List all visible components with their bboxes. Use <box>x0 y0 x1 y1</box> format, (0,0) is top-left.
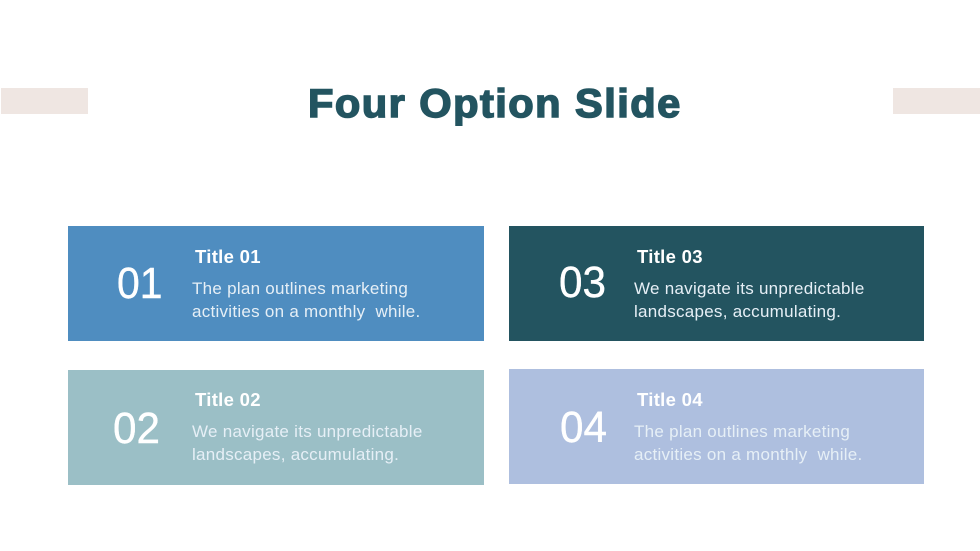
number 02: 02 <box>113 404 160 453</box>
number 03: 03 <box>559 258 606 307</box>
panel: option 01 <box>68 226 484 341</box>
body text 04: The plan outlines marketing activities on a monthly while. <box>634 422 863 464</box>
heading: title 01: Title 01 <box>195 246 261 267</box>
body text 02: We navigate its unpredictable landscapes, accumulating. <box>192 422 423 464</box>
heading: title 04: Title 04 <box>637 389 703 410</box>
panel: option 02 <box>68 370 484 485</box>
body text 03: We navigate its unpredictable landscapes, accumulating. <box>634 279 865 321</box>
number 04: 04 <box>560 403 607 452</box>
panel: option 03 <box>509 226 924 341</box>
heading: title 02: Title 02 <box>195 389 261 410</box>
number 01: 01 <box>117 259 163 308</box>
right decorative bar <box>893 88 980 114</box>
body text 01: The plan outlines marketing activities on a monthly while. <box>192 279 421 321</box>
title: Four Option Slide <box>308 82 682 126</box>
panel: option 04 <box>509 369 924 484</box>
heading: title 03: Title 03 <box>637 246 703 267</box>
left decorative bar <box>1 88 88 114</box>
